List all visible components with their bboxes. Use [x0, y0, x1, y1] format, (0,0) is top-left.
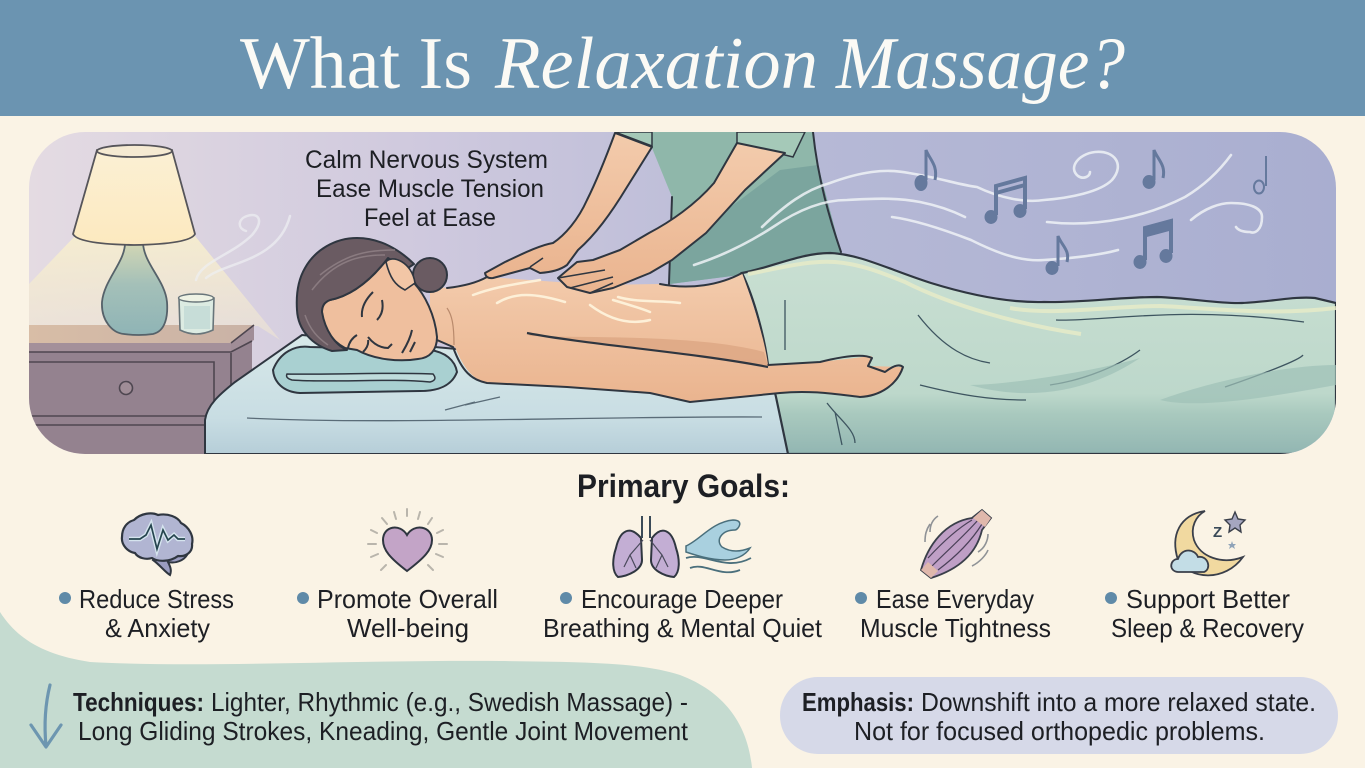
hair bun — [413, 258, 447, 292]
title: What Is — [240, 23, 472, 105]
text block: techniques: Lighter, Rhythmic (e.g., Swedish Massage) - — [211, 687, 688, 717]
pillow — [273, 347, 457, 393]
title: Massage? — [835, 23, 1125, 105]
music waves — [694, 152, 1262, 265]
arrow: downward — [31, 685, 61, 747]
title: Relaxation — [494, 23, 818, 105]
emphasis text: Emphasis: — [802, 687, 914, 717]
goal: reduce stress: & Anxiety — [105, 613, 210, 643]
benefit captions — [306, 150, 546, 226]
text block: techniques — [73, 687, 689, 746]
icons: music notes — [915, 150, 1266, 274]
title — [240, 23, 1125, 105]
client head — [297, 238, 447, 360]
goal: ease muscle tightness — [855, 510, 1051, 643]
panel: massage illustration — [29, 132, 1336, 454]
emphasis text: Not for focused orthopedic problems. — [854, 716, 1265, 746]
icon: brain — [122, 513, 192, 575]
emphasis text: Downshift into a more relaxed state. — [921, 687, 1316, 717]
goal: deeper breathing — [543, 516, 823, 643]
panel: emphasis — [780, 677, 1338, 754]
client body — [430, 273, 903, 402]
lamp — [73, 145, 195, 335]
icon: moon and cloud — [1171, 511, 1245, 575]
blanket — [742, 253, 1336, 454]
goal: better sleep: Sleep & Recovery — [1111, 613, 1304, 643]
hair — [297, 238, 414, 351]
icon: wave — [686, 520, 751, 572]
icon: drawer knob — [120, 382, 132, 394]
nightstand — [29, 325, 254, 454]
emphasis text — [802, 687, 1316, 746]
goal: ease muscle tightness: Ease Everyday — [876, 584, 1034, 614]
goal: promote well-being — [297, 509, 498, 643]
goal: deeper breathing: Encourage Deeper — [581, 584, 783, 614]
icon: muscle — [921, 510, 991, 578]
goal: reduce stress — [59, 513, 234, 643]
header banner — [0, 0, 1365, 116]
face — [322, 258, 437, 360]
ear — [386, 259, 415, 290]
benefit captions: Calm Nervous System — [305, 146, 548, 174]
text block: techniques: Techniques: — [73, 687, 204, 717]
heading: primary goals: Primary Goals: — [577, 468, 790, 504]
benefit captions: Ease Muscle Tension — [316, 175, 544, 203]
candle glass — [178, 294, 214, 334]
goal: reduce stress: Reduce Stress — [79, 584, 234, 614]
massage table sheet — [205, 335, 800, 454]
lamp light cone — [29, 236, 280, 340]
bottom-left green wave — [0, 612, 752, 768]
therapist arms and hands — [485, 133, 785, 293]
goal: promote well-being: Well-being — [347, 613, 469, 643]
candle steam — [196, 215, 290, 280]
closed eyes, nose and mouth — [348, 292, 415, 353]
goal: better sleep: Support Better — [1126, 584, 1290, 614]
icon: lungs — [613, 516, 679, 577]
text block: techniques: Long Gliding Strokes, Kneading, Gentle Joint Movement — [78, 716, 689, 746]
icon: heart with rays — [368, 509, 447, 571]
icon: moon and cloud: Z — [1213, 524, 1222, 541]
goal: better sleep — [1105, 511, 1304, 643]
goal: promote well-being: Promote Overall — [317, 584, 498, 614]
goal: ease muscle tightness: Muscle Tightness — [860, 613, 1051, 643]
goal: deeper breathing: Breathing & Mental Quiet — [543, 613, 823, 643]
benefit captions: Feel at Ease — [364, 204, 496, 232]
therapist shirt — [615, 132, 841, 284]
